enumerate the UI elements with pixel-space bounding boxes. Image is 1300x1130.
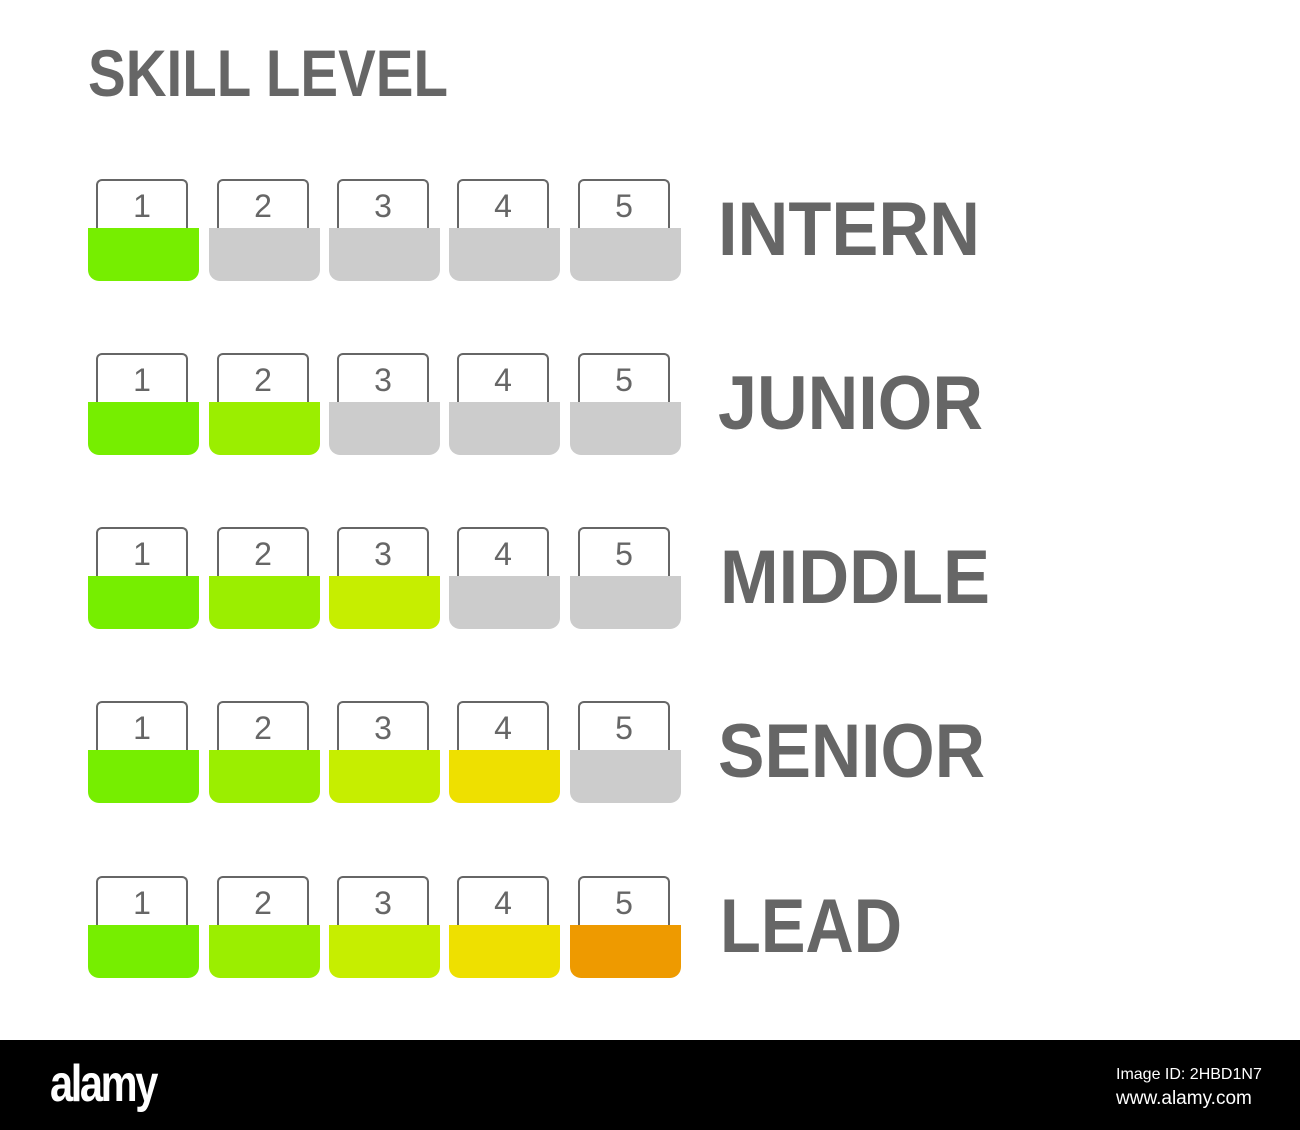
- footer bar: Image ID: 2HBD1N7: [1116, 1066, 1262, 1083]
- row: intern: 4: [494, 188, 512, 224]
- row: intern: INTERN: [718, 187, 980, 272]
- row: lead: LEAD: [720, 884, 902, 969]
- row: intern: 3: [374, 188, 392, 224]
- row: senior: [88, 701, 985, 803]
- row: junior: 1: [133, 362, 151, 398]
- row: junior: [88, 353, 983, 455]
- row: intern: 2: [254, 188, 272, 224]
- row: senior: 4: [494, 710, 512, 746]
- row: senior: SENIOR: [718, 709, 985, 794]
- row: junior: 4: [494, 362, 512, 398]
- row: intern: [88, 179, 980, 281]
- row: middle: MIDDLE: [720, 535, 990, 620]
- row: junior: 3: [374, 362, 392, 398]
- row: senior: 5: [615, 710, 633, 746]
- row: lead: 4: [494, 885, 512, 921]
- row: lead: [88, 876, 902, 978]
- footer bar: [0, 1040, 1300, 1130]
- row: middle: 5: [615, 536, 633, 572]
- row: middle: 2: [254, 536, 272, 572]
- row: middle: [88, 527, 990, 629]
- footer bar: www.alamy.com: [1116, 1088, 1252, 1109]
- footer bar: alamy: [50, 1055, 156, 1113]
- title: SKILL LEVEL: [88, 36, 448, 110]
- row: senior: 3: [374, 710, 392, 746]
- row: intern: 1: [133, 188, 151, 224]
- row: middle: 3: [374, 536, 392, 572]
- row: junior: 5: [615, 362, 633, 398]
- row: lead: 1: [133, 885, 151, 921]
- row: intern: 5: [615, 188, 633, 224]
- row: lead: 5: [615, 885, 633, 921]
- row: middle: 1: [133, 536, 151, 572]
- row: middle: 4: [494, 536, 512, 572]
- row: lead: 3: [374, 885, 392, 921]
- row: junior: JUNIOR: [718, 361, 983, 446]
- row: junior: 2: [254, 362, 272, 398]
- row: lead: 2: [254, 885, 272, 921]
- row: senior: 2: [254, 710, 272, 746]
- row: senior: 1: [133, 710, 151, 746]
